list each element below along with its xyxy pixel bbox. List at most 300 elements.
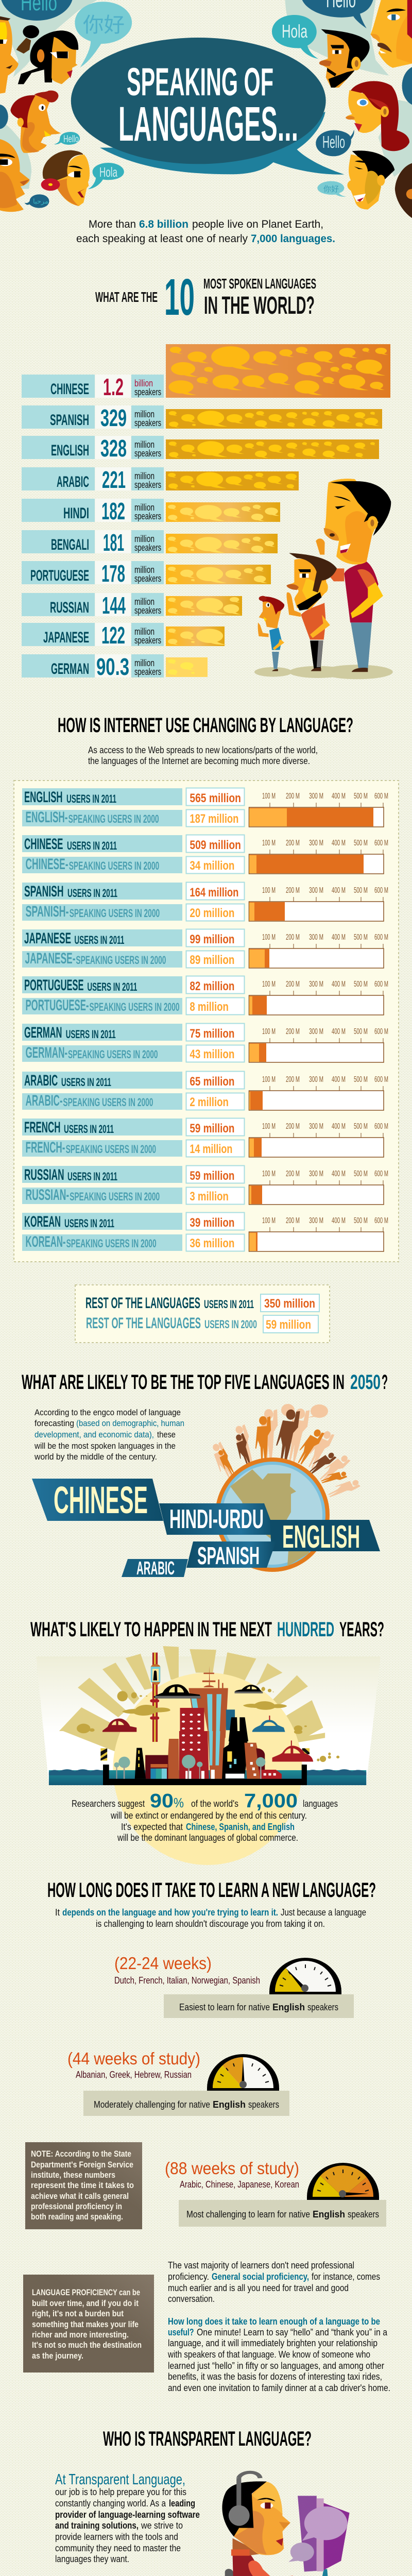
- row: korean internet users: 100 M: [262, 1216, 276, 1225]
- row: arabic internet users: 600 M: [374, 1075, 388, 1084]
- block: moderately challenging: (44 weeks of study): [67, 2049, 200, 2068]
- row: english internet users: 187 million: [190, 812, 238, 826]
- bar: chinese: [166, 344, 390, 398]
- row: chinese internet users: 34 million: [190, 859, 234, 873]
- panel: rest of the languages: REST OF THE LANGUAGES: [86, 1315, 201, 1332]
- row: spanish: [22, 404, 164, 431]
- illustration: future city: [36, 1646, 381, 1865]
- text: at transparent language: provider of language-learning software: [55, 2510, 200, 2520]
- row: korean internet users: 400 M: [332, 1216, 346, 1225]
- intro: internet use: [88, 745, 318, 766]
- text: at transparent language: community they need to master the: [55, 2543, 181, 2553]
- bar: japanese: [166, 626, 227, 646]
- text: at transparent language: we strive to: [141, 2520, 183, 2531]
- text: ninety percent extinction: languages: [303, 1799, 338, 1809]
- row: korean internet users: USERS IN 2011: [64, 1217, 114, 1230]
- text: forecasting paragraph: world by the middle of the century.: [34, 1452, 157, 1462]
- row: korean internet users: 500 M: [354, 1216, 368, 1225]
- row: russian: million: [134, 597, 154, 607]
- row: arabic internet users: 65 million: [190, 1075, 234, 1089]
- row: korean internet users: 39 million: [190, 1216, 234, 1230]
- text: how long to be useful: benefits, it was the basis for dozens of interesting taxi rides,: [168, 2371, 382, 2382]
- text: at transparent language: our job is to help prepare you for this: [55, 2487, 186, 2497]
- row: japanese: speakers: [134, 635, 161, 646]
- note box: [25, 2142, 142, 2229]
- row: french internet users: FRENCH: [24, 1119, 60, 1136]
- row: japanese: [22, 622, 164, 649]
- face: boy left with red curl: [10, 91, 61, 153]
- row: french internet users: 400 M: [332, 1122, 346, 1131]
- row: french internet users: SPEAKING USERS IN 2000: [66, 1143, 156, 1156]
- row: portuguese internet users: PORTUGUESE: [24, 977, 83, 994]
- illustration: learner at computer: [222, 2472, 355, 2576]
- row: bengali: BENGALI: [51, 536, 89, 553]
- row: portuguese: PORTUGUESE: [30, 567, 89, 584]
- bar: spanish: [166, 409, 382, 429]
- row: chinese internet users: USERS IN 2011: [67, 839, 117, 852]
- callout: language proficiency: right, it's not a burden but: [32, 2309, 124, 2318]
- row: arabic: [22, 466, 164, 493]
- text: forecasting paragraph: forecasting: [35, 1418, 74, 1428]
- bubble: right hello: [316, 130, 354, 156]
- bubble texts: Hola: [282, 21, 308, 42]
- row: german internet users: USERS IN 2011: [66, 1028, 116, 1041]
- row: russian: 144: [102, 592, 126, 619]
- row: portuguese internet users: 100 M: [262, 980, 276, 989]
- text: forecasting paragraph: (based on demographic, human: [76, 1418, 184, 1428]
- bubble: left hola: [88, 163, 124, 189]
- text: forecasting paragraph: According to the engco model of language: [35, 1408, 181, 1417]
- text: depends on the language: [55, 1907, 366, 1929]
- title: [118, 60, 298, 151]
- row: chinese: CHINESE: [50, 381, 89, 398]
- row: spanish: speakers: [134, 418, 161, 428]
- row: german internet users: GERMAN-: [26, 1044, 67, 1061]
- row: english: million: [134, 439, 154, 450]
- chart: speakers bars: [22, 344, 390, 680]
- ribbon: arabic: ARABIC: [136, 1557, 175, 1579]
- text: how long to be useful: One minute! Learn to say “hello” and “thank you” in a: [197, 2327, 388, 2337]
- callout: language proficiency: It's not so much the destination: [32, 2340, 142, 2350]
- row: portuguese internet users: SPEAKING USERS IN 2000: [90, 1001, 179, 1013]
- row: russian internet users: 3 million: [190, 1190, 229, 1204]
- boy: [258, 596, 284, 671]
- gauge: easy: [269, 1958, 341, 1995]
- buildings lower: [114, 1730, 339, 1779]
- row: arabic: 221: [102, 466, 126, 493]
- peach background figures: [208, 1404, 360, 1501]
- row: korean internet users: 200 M: [286, 1216, 300, 1225]
- bar: bengali: [166, 534, 278, 553]
- text: at transparent language: languages they want.: [55, 2554, 129, 2564]
- row: japanese internet users: USERS IN 2011: [74, 934, 124, 946]
- text: ninety percent extinction: 90: [150, 1790, 174, 1812]
- row: french internet users: [22, 1118, 388, 1157]
- row: bengali: speakers: [134, 543, 161, 553]
- row: portuguese: speakers: [134, 573, 161, 584]
- row: english internet users: [22, 788, 388, 827]
- bubble texts: Hola: [99, 164, 117, 180]
- row: japanese internet users: 100 M: [262, 933, 276, 942]
- row: japanese internet users: 300 M: [309, 933, 323, 942]
- face: man with mustache, top right: [370, 0, 412, 68]
- row: japanese internet users: 99 million: [190, 933, 234, 946]
- row: chinese: [22, 374, 164, 400]
- text: ninety percent extinction: of the world's: [191, 1799, 238, 1809]
- note box: institute, these numbers: [31, 2170, 115, 2180]
- row: english internet users: USERS IN 2011: [66, 792, 116, 805]
- row: french internet users: FRENCH-: [26, 1139, 65, 1156]
- globe: [215, 1458, 330, 1572]
- heading: next hundred years: HUNDRED: [277, 1618, 334, 1641]
- ribbon: spanish: [186, 1541, 276, 1570]
- bar: russian: [166, 596, 242, 616]
- text: forecasting paragraph: [34, 1408, 184, 1462]
- row: french internet users: 300 M: [309, 1122, 323, 1131]
- row: arabic internet users: 200 M: [286, 1075, 300, 1084]
- row: spanish internet users: 300 M: [309, 886, 323, 895]
- heading: top five languages: 2050: [350, 1371, 381, 1394]
- text: at transparent language: [55, 2471, 200, 2564]
- note box: Department's Foreign Service: [31, 2160, 133, 2170]
- ribbon: hindi-urdu: [159, 1503, 276, 1535]
- bubble texts: Hello: [322, 132, 345, 151]
- row: arabic: ARABIC: [57, 473, 89, 490]
- ribbon: hindi-urdu: HINDI-URDU: [169, 1504, 264, 1534]
- block: easiest languages: [114, 1954, 354, 2018]
- row: spanish: 329: [100, 404, 127, 431]
- block: moderately challenging: Albanian, Greek, Hebrew, Russian: [76, 2070, 192, 2080]
- row: russian: RUSSIAN: [50, 599, 89, 616]
- row: korean internet users: KOREAN: [24, 1213, 61, 1230]
- elevator tower: [150, 1653, 160, 1742]
- bar: english: [166, 439, 379, 459]
- row: english internet users: SPEAKING USERS IN 2000: [68, 812, 159, 825]
- row: french internet users: 200 M: [286, 1122, 300, 1131]
- row: english internet users: 565 million: [190, 791, 241, 805]
- text: at transparent language: At Transparent Language,: [55, 2471, 185, 2488]
- row: arabic internet users: [22, 1072, 388, 1110]
- row: german internet users: 600 M: [374, 1027, 388, 1036]
- row: chinese internet users: CHINESE-: [26, 856, 68, 873]
- text: at transparent language: leading: [169, 2498, 195, 2509]
- row: french internet users: 14 million: [190, 1142, 232, 1156]
- panel: rest of the languages: [75, 1285, 330, 1343]
- ground shadows: [254, 665, 393, 679]
- text: depends on the language: depends on the language and how you're trying to learn it.: [62, 1907, 278, 1918]
- note box: both reading and speaking.: [31, 2212, 123, 2222]
- caption: hardest: English: [313, 2209, 345, 2219]
- pale green speech shapes: [0, 0, 412, 189]
- row: portuguese internet users: 8 million: [190, 1000, 229, 1014]
- row: english: [22, 435, 164, 462]
- illustration: globe with people: [208, 1404, 360, 1572]
- row: portuguese: 178: [101, 560, 125, 587]
- caption: easiest: Easiest to learn for native: [179, 2002, 270, 2012]
- row: hindi: HINDI: [63, 505, 89, 522]
- face: woman with red hair: [346, 81, 409, 151]
- row: arabic internet users: ARABIC: [24, 1072, 58, 1089]
- row: spanish internet users: SPANISH: [24, 883, 64, 900]
- row: japanese internet users: [22, 929, 388, 968]
- main title bubble: [71, 38, 326, 164]
- row: german internet users: 500 M: [354, 1027, 368, 1036]
- face: asian man: [347, 150, 394, 210]
- row: spanish internet users: [22, 882, 388, 921]
- row: arabic internet users: ARABIC-: [26, 1092, 63, 1109]
- row: arabic internet users: 500 M: [354, 1075, 368, 1084]
- note box: represent the time it takes to: [31, 2180, 134, 2190]
- row: chinese internet users: 200 M: [286, 839, 300, 848]
- bubble texts: [21, 0, 356, 206]
- row: russian internet users: 59 million: [190, 1169, 234, 1183]
- row: spanish internet users: 20 million: [190, 906, 234, 920]
- heading: ten most spoken: WHAT ARE THE: [95, 289, 158, 305]
- hero illustration: speaking faces and bubbles: [0, 0, 412, 218]
- gauge: moderate: [207, 2054, 279, 2091]
- row: spanish internet users: SPEAKING USERS IN 2000: [70, 907, 160, 920]
- text: depends on the language: Just because a language: [281, 1907, 366, 1918]
- ribbon: english: [270, 1519, 380, 1555]
- row: japanese: JAPANESE: [43, 629, 89, 646]
- row: english internet users: 500 M: [354, 792, 368, 801]
- face: left top: [0, 16, 19, 94]
- text: ?: [382, 1371, 388, 1394]
- heading: ten most spoken: MOST SPOKEN LANGUAGES: [203, 276, 316, 292]
- row: spanish internet users: USERS IN 2011: [67, 887, 117, 900]
- sun rays and sun: [59, 1646, 325, 1865]
- text: how long to be useful: language, and it will immediately brighten your relationship: [168, 2338, 377, 2348]
- text: general social proficiency: The vast majority of learners don't need professional: [168, 2260, 354, 2270]
- row: bengali: [22, 529, 164, 556]
- text: ninety percent extinction: 7,000: [244, 1790, 298, 1812]
- row: japanese: million: [134, 626, 154, 637]
- row: french internet users: 600 M: [374, 1122, 388, 1131]
- caption: moderate: English: [213, 2099, 246, 2110]
- bearded man: [286, 553, 337, 671]
- block: most challenging: [165, 2159, 386, 2227]
- bubble: left edge: [0, 105, 8, 129]
- intro: internet use: the languages of the Internet are becoming much more diverse.: [88, 756, 310, 766]
- bar: arabic: [166, 471, 299, 490]
- callout: language proficiency: LANGUAGE PROFICIENCY can be: [32, 2287, 140, 2297]
- bubble texts: 你好: [323, 185, 339, 194]
- head with headset: [222, 2472, 290, 2556]
- row: chinese internet users: 400 M: [332, 839, 346, 848]
- text: ninety percent extinction: will be extinct or endangered by the end of this century.: [110, 1810, 307, 1821]
- text: at transparent language: provide learners with the tools and: [55, 2532, 178, 2542]
- row: chinese internet users: [22, 835, 388, 874]
- row: korean internet users: [22, 1213, 388, 1251]
- row: chinese internet users: 300 M: [309, 839, 323, 848]
- face: woman with flower: [41, 150, 90, 206]
- heading: ten most spoken: [95, 268, 316, 326]
- bubble: top left hello: [1, 0, 73, 21]
- row: japanese internet users: 200 M: [286, 933, 300, 942]
- row: german internet users: 100 M: [262, 1027, 276, 1036]
- text: general social proficiency: [168, 2260, 380, 2304]
- row: spanish: million: [134, 409, 154, 419]
- row: portuguese: [22, 560, 164, 587]
- row: japanese internet users: 400 M: [332, 933, 346, 942]
- row: spanish internet users: SPANISH-: [26, 903, 69, 920]
- buildings upper: [77, 1653, 307, 1742]
- row: portuguese internet users: 200 M: [286, 980, 300, 989]
- row: german: 90.3: [96, 653, 129, 680]
- row: chinese: speakers: [134, 387, 161, 397]
- intro text: people live on Planet Earth,: [192, 218, 323, 230]
- row: portuguese internet users: 600 M: [374, 980, 388, 989]
- trees: [114, 1755, 265, 1769]
- row: german internet users: 75 million: [190, 1027, 234, 1041]
- text: general social proficiency: conversation.: [168, 2294, 215, 2304]
- row: japanese internet users: 89 million: [190, 953, 234, 967]
- illustration: three people of growing height: [254, 479, 393, 679]
- face: woman with black hair: [16, 25, 78, 84]
- row: chinese internet users: 100 M: [262, 839, 276, 848]
- row: spanish internet users: 100 M: [262, 886, 276, 895]
- row: arabic internet users: 2 million: [190, 1095, 229, 1109]
- caption: hardest: speakers: [348, 2209, 379, 2219]
- row: russian internet users: 600 M: [374, 1170, 388, 1178]
- coloured figures: [215, 1408, 348, 1487]
- row: portuguese internet users: 82 million: [190, 979, 234, 993]
- text: how long to be useful: learned just “hello” in fifty or so languages, and among other: [168, 2361, 384, 2371]
- intro text: 6.8 billion: [139, 218, 188, 230]
- row: english internet users: 400 M: [332, 792, 346, 801]
- intro text: 7,000 languages.: [251, 233, 335, 245]
- row: japanese internet users: SPEAKING USERS IN 2000: [76, 954, 166, 967]
- row: chinese internet users: 509 million: [190, 838, 241, 852]
- caption: easiest: speakers: [307, 2002, 338, 2012]
- row: bengali: 181: [103, 529, 124, 556]
- text: how long to be useful: useful?: [168, 2327, 194, 2337]
- row: german internet users: 200 M: [286, 1027, 300, 1036]
- bar: german: [166, 657, 208, 677]
- callout: language proficiency: as the journey.: [32, 2351, 83, 2361]
- bubble texts: Hello: [63, 134, 79, 145]
- row: chinese internet users: 500 M: [354, 839, 368, 848]
- face: man left: [0, 139, 29, 212]
- row: german internet users: 43 million: [190, 1047, 234, 1061]
- panel: rest of the languages: 350 million: [264, 1297, 315, 1311]
- text: general social proficiency: General social proficiency,: [212, 2272, 309, 2282]
- row: english internet users: 200 M: [286, 792, 300, 801]
- row: portuguese internet users: 400 M: [332, 980, 346, 989]
- row: german: [22, 653, 164, 680]
- row: spanish internet users: 600 M: [374, 886, 388, 895]
- ribbon: arabic: [122, 1557, 188, 1579]
- bubble: right hola: [272, 15, 318, 59]
- caption: moderate: [83, 2091, 289, 2116]
- text: ninety percent extinction: Researchers suggest: [72, 1799, 145, 1809]
- row: french internet users: USERS IN 2011: [64, 1123, 114, 1136]
- row: hindi: [22, 498, 164, 524]
- callout: language proficiency: richer and more interesting.: [32, 2330, 129, 2340]
- chair: [225, 2569, 271, 2576]
- text: ninety percent extinction: It's expected that: [121, 1822, 183, 1832]
- row: russian internet users: 300 M: [309, 1170, 323, 1178]
- gauge: hard: [307, 2163, 379, 2200]
- row: french internet users: 500 M: [354, 1122, 368, 1131]
- ribbon: chinese: CHINESE: [54, 1479, 148, 1521]
- row: arabic internet users: SPEAKING USERS IN 2000: [63, 1096, 153, 1109]
- row: german internet users: 300 M: [309, 1027, 323, 1036]
- caption: moderate: speakers: [248, 2099, 279, 2110]
- flying cars and clouds: [77, 1684, 307, 1733]
- bubble: top right hello: [302, 0, 373, 28]
- row: chinese internet users: CHINESE: [24, 836, 63, 853]
- intro: internet use: As access to the Web spreads to new locations/parts of the world,: [88, 745, 318, 755]
- caption: easiest: English: [272, 2002, 305, 2012]
- bubble: right small nihao: [317, 181, 346, 197]
- panel: rest of the languages: USERS IN 2011: [204, 1298, 254, 1311]
- city panel backdrop: [36, 1656, 381, 1785]
- row: chinese: billion: [134, 378, 153, 388]
- row: german internet users: SPEAKING USERS IN 2000: [68, 1048, 158, 1061]
- row: portuguese internet users: USERS IN 2011: [87, 980, 137, 993]
- callout: language proficiency: built over time, and if you do it: [32, 2298, 139, 2308]
- row: german: GERMAN: [51, 660, 89, 677]
- tall man: [316, 479, 391, 672]
- bubble texts: مرحبا: [33, 197, 48, 206]
- row: hindi: 182: [101, 498, 125, 524]
- callout: language proficiency: [23, 2275, 154, 2372]
- text: depends on the language: It: [55, 1907, 60, 1918]
- row: english internet users: ENGLISH-: [26, 809, 68, 826]
- panel: rest of the languages: USERS IN 2000: [204, 1318, 257, 1331]
- caption: hardest: Most challenging to learn for native: [186, 2209, 310, 2219]
- ribbon: chinese: [32, 1479, 163, 1521]
- row: portuguese internet users: 300 M: [309, 980, 323, 989]
- row: bengali: million: [134, 534, 154, 544]
- row: german internet users: 400 M: [332, 1027, 346, 1036]
- text: ninety percent extinction: will be the dominant languages of global commerce.: [117, 1833, 298, 1843]
- row: spanish internet users: 164 million: [190, 886, 238, 900]
- row: spanish internet users: 500 M: [354, 886, 368, 895]
- face: bearded man: [319, 29, 370, 88]
- note box: professional proficiency in: [31, 2201, 122, 2211]
- row: japanese internet users: JAPANESE-: [25, 950, 75, 967]
- text: depends on the language: is challenging to learn shouldn't discourage you from taking it on.: [96, 1919, 325, 1929]
- heading: ten most spoken: 10: [164, 268, 195, 326]
- text: how long to be useful: [167, 2316, 390, 2393]
- row: arabic: million: [134, 471, 154, 481]
- row: portuguese internet users: PORTUGUESE-: [26, 997, 89, 1014]
- row: russian internet users: RUSSIAN: [24, 1166, 64, 1183]
- row: chinese internet users: 600 M: [374, 839, 388, 848]
- row: russian internet users: SPEAKING USERS IN 2000: [70, 1190, 160, 1203]
- row: russian internet users: 200 M: [286, 1170, 300, 1178]
- row: english internet users: 300 M: [309, 792, 323, 801]
- row: russian internet users: 400 M: [332, 1170, 346, 1178]
- title: SPEAKING OF: [127, 60, 273, 104]
- caption: easiest: [164, 1994, 354, 2018]
- text: forecasting paragraph: development, and economic data),: [35, 1430, 154, 1439]
- row: spanish: SPANISH: [50, 412, 89, 429]
- row: russian internet users: 500 M: [354, 1170, 368, 1178]
- torso and arm: [233, 2554, 306, 2576]
- sea and platform: [49, 1748, 366, 1785]
- text: general social proficiency: for instance, comes: [312, 2272, 380, 2282]
- row: english: ENGLISH: [51, 442, 89, 459]
- row: german: speakers: [134, 667, 161, 677]
- row: english: 328: [100, 435, 127, 462]
- monitor: [288, 2496, 350, 2576]
- block: easiest languages: (22-24 weeks): [114, 1954, 212, 1973]
- intro text: each speaking at least one of nearly: [76, 233, 248, 245]
- row: german internet users: GERMAN: [24, 1024, 62, 1041]
